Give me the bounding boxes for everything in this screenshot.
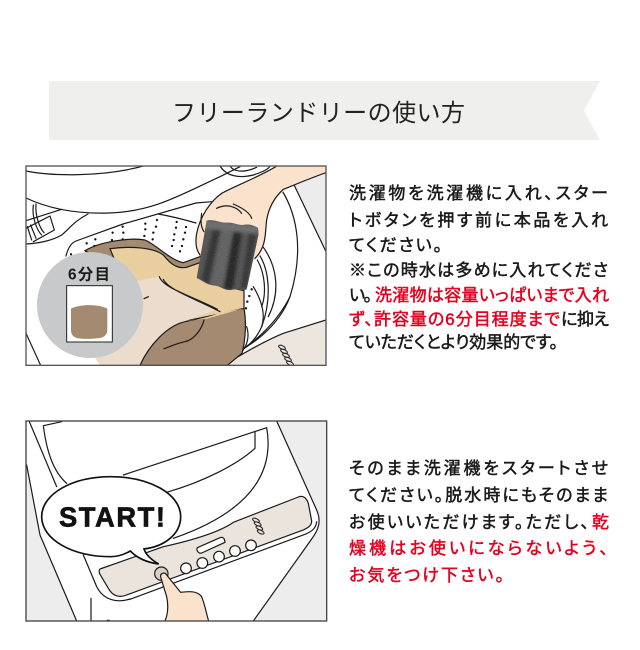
text block: step 1 — [349, 184, 609, 352]
text block: step 2: お気をつけ下さい。 — [349, 566, 504, 585]
icon: hand — [196, 166, 326, 260]
callout: 6分目 gauge — [37, 252, 143, 358]
control panel — [99, 496, 317, 599]
icon: control knobs — [278, 344, 294, 366]
text block: step 2: そのまま洗濯機をスタートさせ — [349, 459, 608, 478]
heading: フリーランドリーの使い方 — [172, 100, 465, 127]
text block: step 1: 洗濯物を洗濯機に入れ、スター — [349, 184, 608, 203]
text block: step 1: てください。 — [349, 236, 442, 255]
text block: step 2: てください。脱水時にもそのまま — [349, 486, 608, 505]
text block: step 1: に抑え — [561, 310, 609, 329]
text block: step 2: 乾 — [592, 513, 609, 532]
text block: step 2 — [349, 459, 609, 585]
panel: step 1 illustration — [26, 166, 326, 366]
gauge circle — [37, 252, 143, 358]
panel: step 2 illustration — [26, 421, 327, 622]
text block: step 2: 燥機はお使いにならないよう、 — [349, 538, 608, 558]
laundry clothes — [70, 239, 245, 365]
text block: step 1: ※この時水は多めに入れてくださ — [349, 261, 608, 280]
bubble text: START! — [59, 502, 165, 533]
title ribbon — [49, 81, 600, 140]
fill level — [71, 305, 107, 339]
container — [67, 286, 112, 342]
gauge label: 6分目 — [68, 266, 110, 283]
lid — [43, 422, 268, 538]
icon: sponge — [196, 220, 259, 290]
text block: step 1: ていただくとより効果的です。 — [349, 333, 558, 352]
icon: pointing finger — [161, 573, 209, 622]
dots: drum holes — [70, 219, 253, 309]
machine body — [26, 421, 319, 622]
text block: step 1: 洗濯物は容量いっぱいまで入れ — [375, 286, 609, 305]
text block: step 1: トボタンを押す前に本品を入れ — [349, 211, 608, 230]
callout: START! speech bubble — [42, 477, 181, 564]
text block: step 2: お使いいただけます。ただし、 — [349, 512, 589, 532]
ribbon background — [49, 81, 600, 140]
display — [197, 537, 225, 553]
buttons — [181, 540, 256, 574]
knobs — [252, 517, 265, 535]
machine body — [26, 166, 326, 366]
text block: step 1: い。 — [349, 286, 372, 305]
text block: step 1: ず、許容量の6分目程度まで — [349, 310, 560, 329]
